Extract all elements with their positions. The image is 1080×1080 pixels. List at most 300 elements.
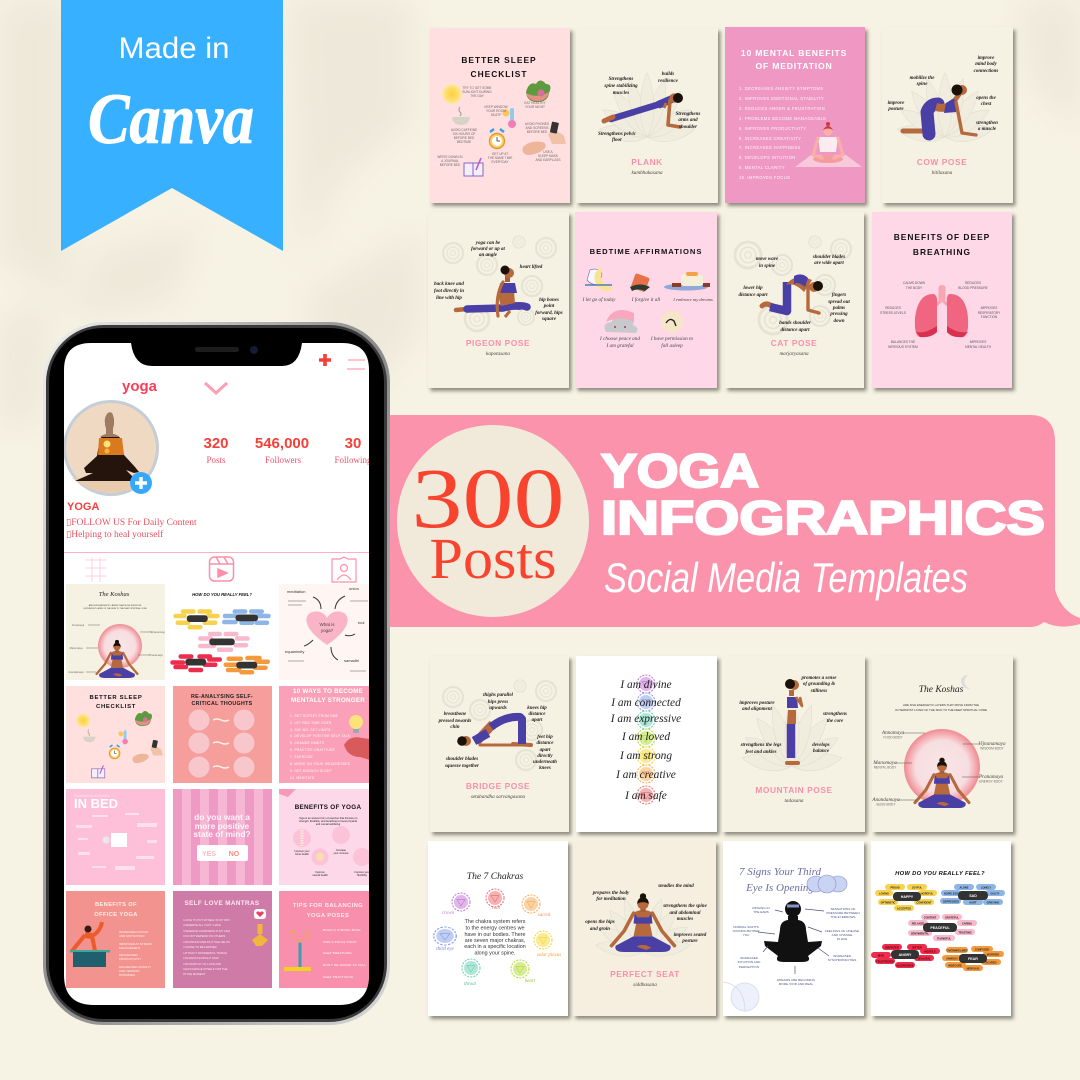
- kosha labels: FOOD BODY: [883, 736, 903, 740]
- card: 7 signs third eye: [723, 841, 864, 1016]
- cat annotations: distance apart: [738, 293, 768, 298]
- emotion words: DEPRESSED: [943, 900, 959, 904]
- perfect seat annotations: and abdominal: [670, 911, 701, 916]
- kosha circle: [904, 729, 980, 805]
- tile: 10 ways to become mentally stronger: 3. SAY NO, SET LIMITS: [290, 728, 331, 732]
- bridge annotations: distance: [537, 741, 554, 746]
- tile: re-analysing self-critical thoughts: CRITICAL THOUGHTS: [192, 701, 253, 707]
- perfect seat annotations: posture: [681, 939, 698, 944]
- tile: re-analysing self-critical thoughts: [173, 686, 272, 783]
- emotion words: CARING: [962, 922, 972, 926]
- bridge annotations: knees hip: [527, 706, 547, 711]
- benefit labels: BLOOD PRESSURE: [958, 286, 988, 290]
- card: better sleep checklist: [430, 28, 570, 203]
- benefit labels: STRESS LEVELS: [880, 311, 906, 315]
- tile: self love mantras: I AM WORTHY OF LOVE AND: [183, 962, 221, 966]
- third eye signs: NORMAL SIGHTS: [733, 925, 759, 929]
- perfect seat annotations: prepares the body: [592, 891, 630, 896]
- heading: BREATHING: [913, 247, 971, 257]
- sleep tips: BEDTIME: [457, 140, 471, 144]
- chakra names: [436, 906, 561, 987]
- cow annotations: spine: [916, 82, 928, 87]
- icon: meditating woman on mat: [795, 122, 862, 167]
- bridge annotations: underneath: [533, 760, 557, 765]
- pigeon annotations: forward or up at: [471, 247, 505, 252]
- tile: positive state of mind: more positive: [195, 821, 250, 831]
- perfect seat annotations: opens the hips: [585, 920, 615, 925]
- cat annotations: fingers: [832, 293, 846, 298]
- tile: benefits of yoga: your immune: [334, 851, 349, 855]
- kosha labels: [871, 730, 1006, 806]
- third eye signs: SOUNDS BOTHER: [732, 929, 760, 933]
- emotion words: GUILTY: [990, 892, 1000, 896]
- perfect seat annotations: for meditation: [596, 897, 626, 902]
- figure: cow pose: [903, 84, 976, 135]
- figure: plank pose: [604, 93, 683, 127]
- tile: benefits of office yoga: IMPROVES AT STRESS: [119, 942, 152, 946]
- figure: pigeon pose: [456, 266, 527, 317]
- chakra names: throat: [464, 982, 477, 987]
- third eye signs: IN LIFE: [837, 937, 847, 941]
- benefit labels: REDUCED: [965, 281, 982, 285]
- stat labels: Posts: [206, 455, 226, 465]
- connector lines: [758, 909, 829, 974]
- mandala backdrop: [443, 680, 556, 770]
- cat annotations: in spine: [759, 264, 776, 269]
- benefits list: 3. REDUCES ANGER & FRUSTRATION: [739, 106, 825, 111]
- emotion words: FEAR: [968, 957, 978, 961]
- profile bio: ▯Helping to heal yourself: [66, 529, 164, 540]
- sleep tips: WRITE DOWN IN: [437, 155, 463, 159]
- benefit labels: MENTAL HEALTH: [965, 345, 992, 349]
- emotion words: ALONE: [959, 886, 969, 890]
- card: I am chakra affirmations: [576, 656, 717, 832]
- bridge annotations: distance: [529, 712, 546, 717]
- pose title: PIGEON POSE: [466, 338, 530, 348]
- emotion words: LONELY: [981, 886, 991, 890]
- benefit labels: REDUCES: [885, 306, 901, 310]
- affirmation captions: I have permission to: [650, 336, 694, 342]
- chakra names: crown: [442, 911, 455, 916]
- card: cow pose: [882, 27, 1013, 203]
- emotion words: JOYFUL: [912, 886, 923, 890]
- tile: self love mantras: IN THE MOMENT: [183, 972, 206, 976]
- cat annotations: pressing: [829, 312, 848, 317]
- sleep tips: AVOID CAFFEINE: [451, 128, 477, 132]
- figure: bridge pose: [457, 717, 531, 746]
- tile: the koshas: Annamaya: [72, 623, 85, 627]
- heading: 7 Signs Your Third: [739, 866, 822, 878]
- emotion words: HURT: [969, 900, 977, 904]
- plank annotations: arms and: [678, 118, 698, 123]
- emotion words: PROUD: [890, 886, 900, 890]
- pose title: BRIDGE POSE: [466, 781, 530, 791]
- profile bio: ▯FOLLOW US For Daily Content: [66, 518, 197, 528]
- phone screen content: [63, 354, 372, 988]
- affirmations list: I am strong: [619, 750, 672, 762]
- emotion words: RELAXED: [912, 922, 924, 926]
- emotion words: THANKFUL: [937, 936, 951, 940]
- banner: speech bubble: [390, 415, 1080, 627]
- cow annotations: connections: [974, 69, 998, 74]
- tile: 10 ways to become mentally stronger: 5. CHANGE HABITS: [290, 741, 324, 745]
- tile: what is yoga: tool: [358, 620, 365, 625]
- affirmation captions: [582, 296, 713, 349]
- tile: how do you really feel: [170, 593, 271, 674]
- bridge annotations: [438, 693, 557, 771]
- benefit labels: THE BODY: [906, 286, 923, 290]
- tile: benefits of yoga: bone health: [295, 852, 309, 856]
- profile name: YOGA: [67, 501, 99, 513]
- tile: tips for balancing yoga poses: KEEP BREATHING: [323, 951, 352, 955]
- plank annotations: muscles: [613, 91, 629, 96]
- profile avatar: [63, 400, 159, 496]
- tile: benefits of yoga: mental health: [312, 873, 328, 877]
- mountain annotations: the core: [827, 719, 844, 724]
- mountain annotations: strengthens the legs: [740, 743, 781, 748]
- pigeon annotations: square: [541, 317, 557, 322]
- third eye signs: SYNCHRONICITIES: [828, 958, 856, 962]
- figure: seated pose: [915, 758, 969, 808]
- card: cat pose: [725, 212, 864, 388]
- cat annotations: distance apart: [780, 328, 810, 333]
- tile: benefits of yoga: Improve your: [294, 849, 310, 853]
- perfect seat annotations: improves seated: [674, 933, 707, 938]
- profile header: [122, 354, 365, 395]
- badge: Made in Canva ribbon: [61, 0, 283, 251]
- heading: [739, 866, 822, 894]
- card: 10 mental benefits of meditation: [725, 27, 865, 203]
- tile: self love mantras: I CHOSE TO BE HAPPIER: [183, 945, 217, 949]
- kosha labels: Pranamaya: [978, 774, 1004, 780]
- tile: benefits of yoga: flexibility: [357, 873, 368, 877]
- tile: self love mantras: I AM ENOUGH RIGHT NOW: [183, 956, 219, 960]
- phone mockup: [43, 322, 390, 1025]
- tile: the koshas: Manomaya: [70, 646, 83, 650]
- emotion words: CONTENT: [924, 916, 937, 920]
- tile: 10 ways to become mentally stronger: 7. EXERCISE: [290, 755, 313, 759]
- tile: benefits of office yoga: DISORDER: [119, 973, 136, 977]
- mountain annotations: balance: [813, 749, 830, 754]
- tile: tips for balancing yoga poses: YOGA POSES: [307, 913, 349, 919]
- emotion words: HOPELESS: [944, 892, 958, 896]
- profile stats: 320: [203, 435, 229, 452]
- tile: the koshas: OUTERMOST LAYER OF THE SKIN TO THE DEEP SPIRITUAL CORE: [83, 607, 148, 610]
- heading: HOW DO YOU REALLY FEEL?: [895, 871, 985, 877]
- pigeon annotations: point: [543, 304, 555, 309]
- sleep tips: YOUR NIGHT: [525, 105, 545, 109]
- title: INFOGRAPHICS: [601, 491, 1045, 544]
- pigeon annotations: yoga can be: [475, 241, 501, 246]
- benefits list: 10. IMPROVES FOCUS: [739, 175, 790, 180]
- emotion words: SENTIMENTAL: [911, 932, 930, 936]
- third eye icon: [807, 875, 847, 893]
- card: the koshas: [871, 656, 1013, 832]
- tile: 10 ways to become mentally stronger: 6. PRACTICE GRATITUDE: [290, 748, 335, 752]
- tile: benefits of yoga: Improve your: [354, 870, 370, 874]
- plank annotations: spine stabilizing: [603, 84, 638, 89]
- perfect seat annotations: [585, 884, 708, 944]
- sleep icons: [442, 80, 566, 176]
- tile: the koshas: Anandamaya: [68, 670, 84, 674]
- tile: benefits of yoga: BENEFITS OF YOGA: [295, 804, 361, 811]
- tab divider: [64, 552, 369, 553]
- sleep tips: GET UP AT: [492, 152, 508, 156]
- mountain annotations: [739, 676, 847, 755]
- tile: 10 ways to become mentally stronger: 10 WAYS TO BECOME: [293, 688, 363, 695]
- tile: 10 ways to become mentally stronger: MENTALLY STRONGER: [291, 697, 365, 704]
- lotus backdrop: [599, 73, 695, 145]
- sleep tips: THE SAME TIME: [488, 156, 512, 160]
- affirmation captions: I am grateful: [605, 342, 634, 349]
- chakra names: heart: [525, 979, 536, 984]
- silhouette: meditating person: [764, 901, 822, 962]
- affirmation captions: fall asleep: [661, 342, 683, 349]
- cow annotations: improve: [978, 56, 995, 61]
- tile: benefits of office yoga: DECREASED ANXIETY: [119, 965, 151, 969]
- benefit labels: NERVOUS SYSTEM: [888, 345, 918, 349]
- bridge annotations: directly: [537, 754, 553, 759]
- emotion words: NERVOUS: [967, 966, 980, 970]
- heading: BENEFITS OF DEEP: [894, 232, 990, 242]
- benefit labels: RESPIRATORY: [978, 311, 1001, 315]
- sleep tips: SUNLIGHT DURING: [462, 90, 492, 94]
- chakra description: [464, 919, 526, 956]
- stat labels: Following: [334, 455, 372, 465]
- tile: the koshas: Pranamaya: [149, 653, 163, 657]
- tile: re-analysing self-critical thoughts: RE-ANALYSING SELF-: [191, 694, 253, 700]
- benefit labels: CALMS DOWN: [903, 281, 926, 285]
- cow annotations: strengthen: [975, 121, 998, 126]
- emotion words: SCARED: [986, 960, 997, 964]
- emotion blobs: [871, 884, 1005, 971]
- tile: benefits of office yoga: AND TENSION: [119, 969, 139, 973]
- badge caption: Made in: [118, 32, 230, 65]
- bridge annotations: pressed towards: [438, 719, 471, 724]
- pigeon annotations: foot directly in: [434, 289, 464, 294]
- card: how do you really feel: [871, 841, 1011, 1016]
- emotion words: GRATEFUL: [945, 916, 959, 920]
- tile: what is yoga: union: [349, 586, 359, 591]
- bridge annotations: squeeze together: [444, 764, 479, 769]
- phone body: [43, 322, 390, 1025]
- tile: tips for balancing yoga poses: KEEP PRACTICING: [323, 975, 354, 979]
- tile: self love mantras: I DESERVE GOODNESS IN MY LIFE: [183, 929, 230, 933]
- tile: what is yoga: What is: [319, 622, 335, 627]
- emotion words: INSECURE: [948, 964, 962, 968]
- mountain annotations: improves posture: [739, 701, 775, 706]
- sleep tips: SIX HOURS OF: [453, 132, 475, 136]
- plank annotations: resilience: [658, 79, 679, 84]
- figure: seated pose: [612, 893, 674, 952]
- tile: self love mantras: I LOVE TO PUT MYSELF IN MY WAY: [183, 918, 230, 922]
- third eye signs: INTUITION AND: [738, 960, 761, 964]
- chakra description: have in our bodies. There: [464, 932, 526, 938]
- bridge annotations: shoulder blades: [445, 757, 478, 762]
- third eye signs: INCREASED: [740, 956, 759, 960]
- bridge annotations: upwards: [489, 706, 507, 711]
- benefits list: [739, 86, 826, 180]
- sanskrit name: setubandha sarvangasana: [471, 794, 526, 800]
- pigeon annotations: forward, hips: [535, 311, 563, 316]
- emotion words: BITTER: [912, 946, 922, 950]
- emotion words: SAD: [969, 894, 977, 898]
- mandala backdrop: [735, 236, 851, 334]
- plank annotations: Strengthens pelvic: [598, 132, 637, 137]
- emotion words: PEACEFUL: [930, 926, 950, 930]
- bridge annotations: apart: [532, 718, 543, 723]
- plank annotations: builds: [662, 72, 674, 77]
- third eye signs: FEELINGS OF UNEASE: [825, 929, 859, 933]
- emotion words: FRUSTRATED: [876, 960, 894, 964]
- emotion words: CONFIDENT: [916, 900, 932, 904]
- heading: OF MEDITATION: [756, 61, 832, 71]
- perfect seat annotations: strengthens the spine: [662, 904, 708, 909]
- tile: benefits of yoga: [279, 789, 371, 885]
- tile: the koshas: [66, 584, 166, 680]
- emotion words: OPTIMISTIC: [881, 900, 896, 904]
- kosha labels: WISDOM BODY: [980, 746, 1005, 750]
- mountain annotations: and alignment: [742, 707, 773, 712]
- tile: self love mantras: I AM PROUD AND AS IT WILL BE OK: [183, 940, 230, 944]
- tile: self love mantras: [173, 891, 272, 988]
- affirmations list: I am connected: [610, 697, 681, 709]
- heading: [894, 232, 990, 257]
- affirmation captions: I forgive it all: [631, 296, 661, 303]
- lotus backdrop: [897, 73, 993, 145]
- posts label: Posts: [430, 526, 556, 591]
- tile: benefits of yoga: strength, flexibility, and breathing to boost physical: [299, 819, 357, 823]
- sleep tips: TRY TO GET SOME: [462, 86, 492, 90]
- cow annotations: opens the: [976, 96, 997, 101]
- kosha labels: Annamaya: [881, 730, 904, 736]
- benefits list: 5. IMPROVES PRODUCTIVITY: [739, 126, 806, 131]
- benefits list: 9. MENTAL CLARITY: [739, 165, 785, 170]
- sanskrit name: siddhasana: [633, 982, 657, 988]
- chakra names: third eye: [436, 947, 455, 952]
- kosha labels: BLISS BODY: [877, 802, 896, 806]
- count: 300: [412, 450, 564, 546]
- card: pigeon pose: [428, 212, 569, 388]
- intro text: [895, 703, 987, 712]
- tile: positive state of mind: YES: [202, 851, 216, 858]
- emotion words: IRRITATED: [885, 946, 899, 950]
- bridge annotations: feet hip: [537, 735, 553, 740]
- mountain annotations: promotes a sense: [800, 676, 837, 681]
- tile: benefits of office yoga: MANAGEMENT: [119, 946, 141, 950]
- affirmations list: I am expressive: [610, 713, 681, 725]
- cat annotations: shoulder blades: [812, 255, 845, 260]
- tile: how do you really feel: HOW DO YOU REALLY FEEL?: [192, 592, 252, 597]
- title: [601, 444, 1045, 544]
- tile: benefits of office yoga: [66, 891, 165, 988]
- pigeon annotations: [434, 241, 563, 322]
- tile: self love mantras: I ENCOURAGE MYSELF FOR THE: [183, 967, 228, 971]
- benefit labels: BALANCES THE: [891, 340, 915, 344]
- tab icon: grid: [85, 558, 107, 582]
- sanskrit name: marjaryasana: [779, 351, 809, 357]
- chakra names: sacral: [538, 913, 551, 918]
- tile: positive state of mind: state of mind?: [193, 829, 251, 839]
- faint corner flower: [723, 982, 759, 1012]
- intro text: OUTERMOST LAYER OF THE SKIN TO THE DEEP SPIRITUAL CORE: [895, 708, 987, 712]
- affirmations list: [610, 679, 681, 802]
- emotion words: MAD: [878, 954, 884, 958]
- tile: 10 ways to become mentally stronger: 10. MEDITATE: [290, 776, 315, 780]
- benefits list: 8. DEVELOPS INTUITION: [739, 155, 796, 160]
- title: YOGA: [601, 444, 759, 497]
- tile: 10 ways to become mentally stronger: 9. GET ENOUGH SLEEP: [290, 769, 332, 773]
- tab icon: tagged: [332, 557, 356, 582]
- emotion words: [876, 886, 1000, 970]
- sleep tips: A JOURNAL: [441, 159, 459, 163]
- Canva wordmark: Canva: [88, 79, 254, 159]
- profile stats: 546,000: [255, 435, 309, 452]
- cat annotations: move wave: [756, 257, 779, 262]
- emotion words: CONFUSED: [975, 948, 989, 952]
- tile: benefits of office yoga: DECREASED: [119, 953, 139, 957]
- sleep tips: AND EARPLUGS: [536, 158, 560, 162]
- third eye signs: PERCEPTION: [739, 965, 759, 969]
- sanskrit name: kumbhakasana: [631, 170, 663, 176]
- pigeon annotations: line with hip: [436, 296, 462, 301]
- mountain annotations: feet and ankles: [745, 750, 777, 755]
- emotion words: JEALOUS: [918, 956, 930, 960]
- third eye signs: AND CHANGE: [832, 933, 852, 937]
- card: bedtime affirmations: [575, 212, 717, 388]
- mandala backdrop: [443, 236, 556, 331]
- cat annotations: lower hip: [743, 286, 763, 291]
- emotion words: LOVING: [879, 892, 889, 896]
- tile: better sleep checklist: CHECKLIST: [96, 704, 136, 710]
- affirmations list: I am creative: [615, 769, 676, 781]
- tile: in bed: Bookworm Activities: [74, 793, 110, 798]
- profile stats: [204, 438, 361, 450]
- sleep tips: AND SCREENS: [525, 126, 549, 130]
- sleep tips: EAT HEALTHY: [524, 101, 546, 105]
- benefits list: 7. INCREASES HAPPINESS: [739, 145, 801, 150]
- figure: cat pose: [762, 274, 823, 313]
- cow annotations: [887, 56, 998, 132]
- third eye signs: SENSATIONS OF: [831, 907, 856, 911]
- pose title: PLANK: [631, 157, 663, 167]
- emotion words: ANGRY: [899, 953, 912, 957]
- pigeon annotations: an angle: [479, 253, 498, 258]
- circle: 300 posts: [397, 425, 589, 617]
- card: perfect seat: [573, 841, 716, 1016]
- pose title: CAT POSE: [771, 338, 817, 348]
- tile: benefits of office yoga: BENEFITS OF: [95, 902, 137, 908]
- profile stats: 30: [345, 435, 361, 452]
- tile: 10 ways to become mentally stronger: [279, 686, 370, 783]
- tile: the koshas: ARE FIVE ENERGETIC LAYERS THAT MOVE FROM THE: [89, 604, 142, 607]
- emotion words: WORRIED: [987, 952, 999, 956]
- sleep tips: THE DAY: [470, 94, 485, 98]
- sleep tips: BEFORE BED: [454, 136, 475, 140]
- tile: tips for balancing yoga poses: FIND A FOCAL POINT: [323, 940, 357, 944]
- benefit labels: IMPROVES: [970, 340, 986, 344]
- kosha labels: Manomaya: [872, 760, 897, 766]
- plank annotations: Strengthens: [609, 77, 633, 82]
- perfect seat annotations: steadies the mind: [657, 884, 694, 889]
- heading: [741, 48, 847, 71]
- benefit labels: IMPROVES: [981, 306, 997, 310]
- sleep tips: 65-67F: [491, 113, 501, 117]
- card: benefits of deep breathing: [872, 212, 1012, 388]
- affirmations list: I am divine: [619, 679, 672, 691]
- affirmation captions: I embrace my dreams: [672, 297, 713, 302]
- intro text: ARE FIVE ENERGETIC LAYERS THAT MOVE FROM THE: [903, 703, 979, 707]
